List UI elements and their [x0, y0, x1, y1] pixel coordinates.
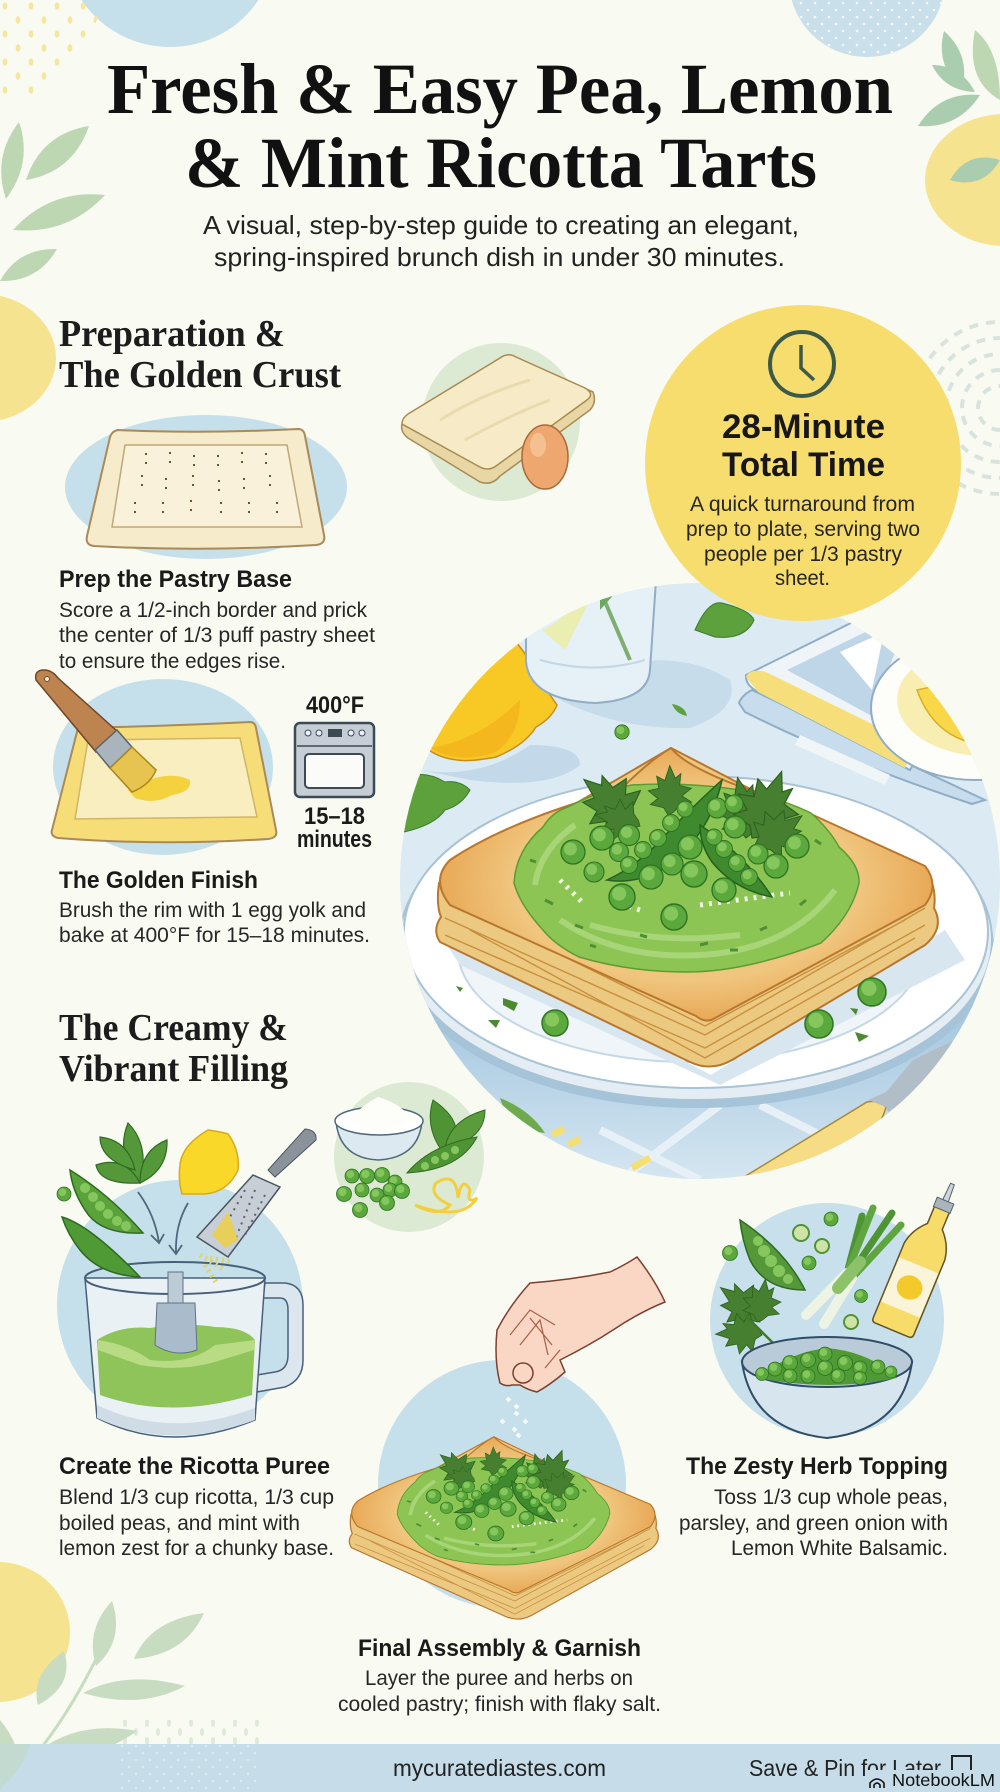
text: the golden finish: bake at 400°F for 15–18 minutes. — [59, 923, 370, 947]
label: bake time: 15–18 — [304, 803, 365, 830]
lemon — [179, 1130, 238, 1194]
flecks — [456, 986, 869, 1042]
zest falling — [200, 1255, 232, 1285]
icon: herb topping bowl — [707, 1176, 973, 1438]
text: zesty herb topping: The Zesty Herb Topping — [686, 1453, 948, 1480]
text: create the ricotta puree: Blend 1/3 cup ricotta, 1/3 cup — [59, 1485, 334, 1509]
icon: ricotta, peas, mint and zest — [334, 1082, 485, 1232]
title — [107, 49, 893, 203]
icon: brushing egg wash — [36, 670, 276, 855]
small tart — [349, 1437, 658, 1619]
heading: preparation: Preparation & — [59, 313, 285, 355]
fork — [744, 1100, 886, 1176]
text: the golden finish: The Golden Finish — [59, 867, 258, 894]
callout: 28-minute total time: sheet. — [775, 566, 830, 590]
decor: left leaf branch — [0, 122, 105, 281]
loose peas — [722, 1212, 868, 1329]
heading: preparation — [59, 313, 341, 396]
heading: filling — [59, 1007, 288, 1090]
under plate shadow — [400, 950, 1000, 1180]
puree — [97, 1325, 255, 1408]
subtitle: A visual, step-by-step guide to creating an elegant, — [203, 210, 799, 240]
lemon on table — [430, 644, 558, 762]
jar body — [85, 1278, 265, 1437]
grater — [268, 1129, 316, 1177]
parsley left — [404, 774, 470, 832]
text: create the ricotta puree: Create the Ricotta Puree — [59, 1453, 330, 1480]
loose pea — [57, 1187, 71, 1201]
pod upper — [70, 1170, 143, 1233]
text: zesty herb topping: Toss 1/3 cup whole peas, — [714, 1485, 948, 1509]
icon: finished tart with hand sprinkling salt — [349, 1257, 665, 1619]
mint leaf top — [695, 603, 754, 637]
subtitle: spring-inspired brunch dish in under 30 minutes. — [214, 242, 785, 272]
jar handle — [257, 1283, 303, 1392]
callout: 28-minute total time: A quick turnaround from — [690, 492, 915, 516]
plate — [402, 921, 994, 1108]
callout: 28-minute total time: prep to plate, serving two — [686, 517, 920, 541]
hand — [496, 1257, 665, 1392]
text: final assembly and garnish: Final Assembly & Garnish — [358, 1635, 641, 1662]
icon: puff pastry and egg — [402, 343, 594, 501]
jar rim — [85, 1262, 265, 1294]
peas in bowl — [757, 1348, 897, 1385]
scallions — [806, 1208, 901, 1324]
text: final assembly and garnish: Layer the puree and herbs on — [365, 1666, 633, 1690]
title: Fresh & Easy Pea, Lemon — [107, 49, 893, 129]
side plate — [870, 658, 982, 781]
callout: 28-minute total time: people per 1/3 pastry — [704, 542, 902, 566]
icon: oven — [295, 723, 374, 797]
icon: scored pastry base — [65, 415, 347, 559]
tablecloth lines — [600, 1105, 830, 1180]
footer bar: Save & Pin for Later — [749, 1755, 941, 1781]
icon: bookmark — [952, 1756, 971, 1772]
decor: right leaf branch — [918, 30, 1000, 182]
salt — [501, 1398, 527, 1437]
label: bake time — [297, 803, 372, 853]
text: create the ricotta puree — [59, 1453, 334, 1560]
text: prep the pastry base: the center of 1/3 puff pastry sheet — [59, 623, 375, 647]
badge: notebooklm: NotebookLM — [892, 1770, 995, 1790]
text: zesty herb topping: Lemon White Balsamic. — [731, 1536, 948, 1560]
footer bar: mycuratediastes.com — [393, 1755, 606, 1781]
bowl — [742, 1362, 912, 1438]
arrows — [138, 1192, 188, 1254]
text: prep the pastry base: to ensure the edges rise. — [59, 649, 286, 673]
blade post — [168, 1272, 183, 1304]
brush — [36, 670, 118, 752]
icon: food processor with ingredients — [57, 1123, 316, 1437]
label: bake time: minutes — [297, 826, 372, 853]
text: final assembly and garnish: cooled pastry; finish with flaky salt. — [338, 1692, 661, 1716]
hero illustration: plated tart — [398, 580, 1000, 1200]
parsley — [707, 1269, 787, 1356]
badge: notebooklm — [866, 1770, 1000, 1792]
bottle — [872, 1176, 973, 1338]
small leaf and pea — [672, 704, 687, 716]
label: oven temperature: 400°F — [306, 692, 364, 719]
tart — [436, 748, 938, 1067]
heading: filling: Vibrant Filling — [59, 1048, 288, 1090]
heading: filling: The Creamy & — [59, 1007, 288, 1049]
decor: top corners and side shapes — [0, 0, 1000, 494]
decor: bottom left lemon and leaves — [0, 1562, 260, 1792]
lemon shadow — [420, 745, 580, 783]
text: final assembly and garnish — [338, 1635, 661, 1716]
icon: clock — [770, 332, 834, 396]
napkin lower — [739, 690, 985, 804]
text: zesty herb topping: parsley, and green onion with — [679, 1511, 948, 1535]
text: the golden finish — [59, 867, 370, 947]
text: the golden finish: Brush the rim with 1 egg yolk and — [59, 898, 366, 922]
mint — [96, 1123, 167, 1183]
callout: 28-minute total time: Total Time — [722, 446, 885, 484]
glass shadow — [560, 660, 732, 728]
pod — [740, 1220, 805, 1290]
water glass — [526, 580, 656, 703]
text: create the ricotta puree: lemon zest for a chunky base. — [59, 1536, 334, 1560]
title: & Mint Ricotta Tarts — [185, 123, 817, 203]
text: prep the pastry base: Prep the Pastry Base — [59, 566, 292, 593]
plate peas — [542, 1010, 568, 1036]
text: prep the pastry base: Score a 1/2-inch border and prick — [59, 598, 367, 622]
callout: 28-minute total time — [645, 305, 961, 621]
callout: 28-minute total time: 28-Minute — [722, 408, 885, 446]
text: prep the pastry base — [59, 566, 375, 673]
footer bar — [0, 1744, 1000, 1792]
tart shadow — [440, 930, 965, 1085]
pod lower — [62, 1217, 140, 1277]
text: create the ricotta puree: boiled peas, and mint with — [59, 1511, 300, 1535]
subtitle — [203, 210, 799, 272]
text: zesty herb topping — [679, 1453, 948, 1560]
heading: preparation: The Golden Crust — [59, 354, 341, 396]
napkin upper — [746, 618, 950, 770]
